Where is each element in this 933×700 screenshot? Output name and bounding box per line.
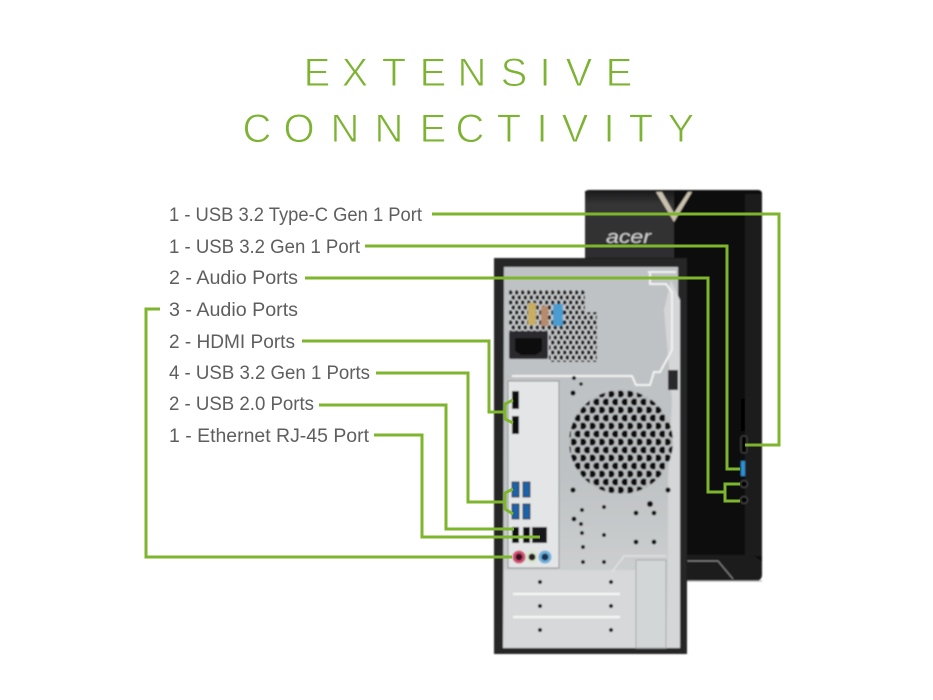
port labels bbox=[169, 205, 423, 447]
connector lines bbox=[146, 214, 779, 557]
acer logo: acer bbox=[606, 227, 652, 247]
card reader slot bbox=[741, 399, 745, 431]
rear metal panel bbox=[503, 267, 680, 648]
rear audio jacks bbox=[514, 552, 550, 562]
label: USB 3.2 Type-C: 1 - USB 3.2 Type-C Gen 1 Port bbox=[169, 205, 423, 226]
label: USB 2.0: 2 - USB 2.0 Ports bbox=[169, 394, 314, 415]
title line: CONNECTIVITY: CONNECTIVITY bbox=[243, 107, 694, 151]
HDMI port two bbox=[512, 416, 519, 434]
line: USB 3.2 front bbox=[365, 246, 740, 469]
label: rear audio: 3 - Audio Ports bbox=[169, 300, 298, 321]
rear view of desktop tower bbox=[494, 258, 687, 654]
label: USB 3.2 front: 1 - USB 3.2 Gen 1 Port bbox=[169, 237, 361, 258]
HDMI port one bbox=[512, 391, 519, 409]
line: USB 2.0 bbox=[319, 405, 514, 529]
PSU coloured reflections bbox=[528, 303, 563, 326]
icon: V logo bbox=[656, 192, 692, 222]
panel crease lines bbox=[512, 272, 676, 385]
chassis holes bbox=[538, 376, 671, 632]
title bbox=[243, 51, 694, 151]
label: USB 3.2 rear: 4 - USB 3.2 Gen 1 Ports bbox=[169, 363, 370, 384]
front panel lighter facet bbox=[585, 191, 674, 258]
power socket bbox=[509, 331, 548, 359]
rear USB 3.2 ports bbox=[512, 482, 530, 519]
side shading band bbox=[745, 194, 762, 556]
label: Ethernet: 1 - Ethernet RJ-45 Port bbox=[169, 426, 370, 447]
front audio jack two bbox=[740, 496, 748, 504]
label: HDMI: 2 - HDMI Ports bbox=[169, 332, 295, 353]
rear frame bbox=[494, 258, 687, 654]
line: Ethernet bbox=[374, 435, 540, 537]
USB blue port bbox=[741, 461, 745, 476]
line: USB 3.2 Type-C bbox=[432, 214, 779, 445]
right rail bbox=[664, 280, 680, 648]
front view of desktop tower bbox=[585, 190, 762, 581]
front audio jack one bbox=[740, 480, 748, 488]
title line: EXTENSIVE: EXTENSIVE bbox=[304, 51, 632, 95]
line: USB 3.2 rear bbox=[376, 373, 513, 514]
label: front audio: 2 - Audio Ports bbox=[169, 268, 298, 289]
fan grille bbox=[569, 390, 673, 494]
line: HDMI bbox=[302, 341, 513, 423]
rear USB 2.0 ports bbox=[512, 527, 530, 543]
ethernet port bbox=[532, 527, 547, 543]
tower body bbox=[585, 190, 762, 581]
USB-C port bbox=[741, 436, 747, 453]
PSU vent bbox=[509, 290, 597, 362]
line: rear audio bbox=[146, 309, 512, 557]
line: front audio bbox=[305, 278, 740, 501]
IO plate bbox=[508, 381, 559, 568]
expansion slots bbox=[504, 556, 666, 648]
tower foot bbox=[687, 555, 762, 581]
